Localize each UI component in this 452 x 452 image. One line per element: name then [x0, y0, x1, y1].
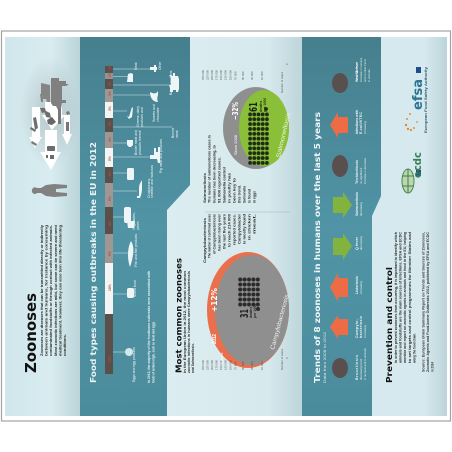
percent labels: 27%	[108, 355, 112, 362]
axis labels: Salmonellosis: 200 000	[210, 69, 214, 80]
trend labels: decreasing	[359, 202, 363, 216]
axis labels: Campylobacteriosis: 125 000	[224, 359, 228, 370]
Campylobacteriosis text: the last five years	[222, 214, 226, 249]
Campylobacteriosis text: to reach 214 000	[228, 214, 232, 247]
trend labels: Brucellosis	[355, 355, 359, 380]
axis labels: Campylobacteriosis: 10 000	[260, 361, 264, 370]
panel: intro	[5, 37, 81, 416]
axis labels: Salmonellosis: 175 000	[214, 69, 218, 80]
label: Campylobacteriosis: Campylobacteriosis	[270, 294, 291, 351]
axis labels: Campylobacteriosis: 225 000	[206, 359, 210, 370]
label: Salmonellosis: Salmonellosis	[276, 112, 292, 158]
trend marker: West Nile fever	[332, 73, 348, 93]
food labels: products thereof	[138, 130, 142, 155]
Campylobacteriosis text: reported cases.	[232, 214, 236, 245]
panel: prevention light	[372, 37, 447, 416]
Salmonellosis text: Salmonella control	[222, 167, 226, 203]
percent labels: 18%	[108, 284, 112, 291]
Salmonellosis text: is found	[248, 189, 252, 203]
food labels: meat	[175, 130, 179, 138]
Salmonellosis circle labels: 61	[247, 102, 260, 112]
prevention text: along the food chain.	[411, 333, 416, 363]
Campylobacteriosis text: The number of confirmed cases	[208, 214, 212, 258]
efsa ring dots	[405, 113, 418, 131]
percent labels: 8%	[108, 221, 112, 226]
Salmonellosis text: The number of salmonellosis cases in	[208, 135, 212, 203]
heading: most common zoonoses: Most common zoonoses	[174, 258, 184, 373]
axis labels: Campylobacteriosis: Number of cases	[280, 348, 284, 370]
axis labels: Campylobacteriosis: 175 000	[214, 359, 218, 370]
trend marker: Campylobacteriosis	[330, 315, 348, 339]
percent labels: 2%	[108, 81, 112, 86]
logo: EFSA	[405, 67, 421, 131]
trend labels: Campylo-	[355, 318, 359, 338]
percent labels: 5%	[108, 171, 112, 176]
sources text	[422, 232, 434, 372]
prevention text	[393, 231, 416, 363]
most common text	[182, 270, 195, 373]
trend marker: VTEC	[330, 112, 348, 138]
axis labels: Campylobacteriosis: 25 000	[250, 361, 254, 370]
percent labels: 9%	[108, 251, 112, 256]
trend labels: Salmonellosis	[355, 192, 359, 216]
axis labels: Campylobacteriosis: 50 000	[241, 361, 245, 370]
food note	[146, 271, 156, 383]
Salmonellosis text: Salmonellosis	[203, 173, 207, 203]
heading: prevention: Prevention and control	[385, 267, 394, 383]
percent labels: 1%	[108, 65, 112, 70]
divider	[205, 211, 290, 213]
food labels	[132, 61, 179, 382]
heading: trends: Trends of 8 zoonoses in humans over the last 5 years	[313, 112, 322, 383]
prevention text: monitor and report on zoonotic agents in animals and food in the EU, helping	[402, 232, 407, 363]
food labels: products and	[140, 107, 144, 127]
axis labels: Salmonellosis: Number of cases	[280, 71, 284, 93]
intro text: medical treatment. However, they can also turn into life-threatening	[57, 224, 62, 356]
axis labels: Campylobacteriosis	[201, 348, 289, 370]
axis labels: Salmonellosis: 100 000	[228, 69, 232, 80]
trend labels: bacteriosis	[359, 316, 363, 338]
Salmonellosis text: in poultry has	[228, 173, 232, 203]
axis labels: Salmonellosis: 75 000	[234, 71, 238, 80]
intro text	[39, 224, 67, 356]
axis labels: Salmonellosis: 10 000	[260, 71, 264, 80]
food labels: Eggs and egg products	[132, 347, 136, 382]
efsa tagline: European Food Safety Authority	[424, 67, 428, 133]
axis labels: Salmonellosis: 0	[285, 63, 289, 65]
Salmonellosis text: Salmonella	[242, 185, 246, 203]
sources text: Zoonotic Agents and Food-borne Outbreaks 2012, published by EFSA and ECDC	[426, 232, 430, 372]
intro text: Most zoonotic infections are mild, but some can be severe and need	[53, 224, 58, 356]
trend labels: increase in humans	[359, 57, 363, 82]
trend labels: Listeriosis	[355, 276, 359, 294]
food icons	[124, 65, 179, 356]
Campylobacteriosis text	[203, 213, 256, 263]
intro text: contaminated foodstuffs or through contact with infected animals.	[48, 225, 53, 356]
heading: food types: Food types causing outbreaks in the EU in 2012	[89, 142, 98, 383]
Salmonellosis circle labels: Since 2008	[233, 134, 238, 155]
sources text: in 2014	[430, 362, 434, 372]
Salmonellosis circle labels: −32%	[231, 102, 240, 120]
axis labels: Campylobacteriosis: 0	[285, 357, 289, 359]
axis labels: Salmonellosis: 50 000	[241, 71, 245, 80]
Salmonellosis text	[203, 135, 256, 203]
axis labels: Campylobacteriosis: 75 000	[234, 361, 238, 370]
most common text: and Salmonellosis.	[190, 343, 195, 373]
most common text: In the European Union in 2012, the most common	[182, 270, 187, 373]
sources text: Source: European Union Summary Report on Trends and Sources of Zoonoses,	[422, 232, 426, 372]
percent labels	[108, 65, 112, 362]
logo: ECDC globe	[402, 169, 421, 193]
Campylobacteriosis circle labels: 31	[238, 309, 251, 318]
intro text: conditions.	[62, 334, 67, 356]
trend labels: Trichinellosis	[355, 160, 359, 184]
Campylobacteriosis text: is mostly found	[242, 214, 246, 244]
food labels: Pig meat and products	[159, 139, 163, 173]
food labels: Sweets and	[152, 104, 156, 122]
percent labels: 2%	[108, 72, 112, 77]
prevention text: In order to prevent zoonoses from occurring, it is important to identify which	[393, 232, 398, 363]
leader lines	[113, 69, 172, 352]
Salmonellosis text: 91 000 reported cases.	[218, 157, 222, 203]
Campylobacteriosis circle labels: 2012	[212, 334, 218, 344]
food labels: Bovine	[171, 128, 175, 138]
Campylobacteriosis circle labels	[210, 288, 257, 364]
dots: 61 Salmonellosis	[248, 107, 269, 165]
food labels: Other	[158, 61, 162, 70]
axis labels: Salmonellosis: 25 000	[250, 71, 254, 80]
food labels: Bakery products	[169, 70, 173, 95]
panel: food types	[80, 37, 190, 416]
percent labels: 6%	[108, 196, 112, 201]
trend labels: increasing	[363, 325, 367, 338]
food labels: Meat	[134, 62, 138, 70]
percent labels: 4%	[108, 121, 112, 126]
trend marker: Listeriosis	[330, 273, 348, 302]
axis labels: Salmonellosis: 150 000	[219, 69, 223, 80]
Campylobacteriosis text: Campylobacteriosis	[203, 218, 207, 263]
food labels: Mixed food	[133, 280, 137, 297]
axis labels: Campylobacteriosis: 250 000	[201, 359, 205, 370]
trend labels: Q fever	[355, 236, 359, 250]
percent labels: 4%	[108, 137, 112, 142]
trend marker: Q fever	[333, 233, 352, 260]
icon: animals to human arrows	[20, 57, 80, 170]
Campylobacteriosis text: meat.	[252, 214, 256, 234]
most common text: zoonotic infections in humans were Campylobacteriosis	[186, 270, 191, 373]
Campylobacteriosis circle labels: deaths	[249, 307, 253, 318]
rotated text layer	[22, 57, 434, 383]
panel: middle light	[167, 37, 302, 416]
trend marker: Trichinellosis	[332, 155, 348, 177]
trend labels: West Nile fever	[355, 61, 359, 82]
food note: In 2012, the majority of the foodborne outbreaks were associated with	[146, 271, 151, 383]
trend marker: Salmonellosis	[333, 192, 352, 218]
axis labels: Campylobacteriosis: 100 000	[228, 359, 232, 370]
axis labels: Salmonellosis: 225 000	[206, 69, 210, 80]
trends subtitle: Data from 2008 to 2012	[323, 332, 327, 383]
trend labels: in humans and in animals	[363, 348, 367, 380]
Campylobacteriosis text: of Campylobacteriosis	[212, 214, 216, 254]
trend labels: increase or decrease	[363, 157, 367, 184]
trend marker: Brucellosis	[332, 358, 348, 378]
food labels: chocolate	[156, 107, 160, 122]
axis labels: Campylobacteriosis: 200 000	[210, 359, 214, 370]
Salmonellosis text: humans has been decreasing, to	[212, 144, 216, 203]
Campylobacteriosis text: has been rising over	[218, 213, 222, 251]
axis labels: Salmonellosis: 125 000	[224, 69, 228, 80]
axis labels: Salmonellosis	[201, 63, 289, 93]
food labels: Fish and fish products	[134, 234, 138, 267]
trend labels: no significant	[359, 167, 363, 184]
food note: foods of animal origin, such as meat and eggs.	[150, 321, 156, 383]
food labels: Cheese, dairy	[136, 106, 140, 127]
panel: trends band	[302, 37, 381, 416]
Campylobacteriosis text: in chicken	[248, 214, 252, 240]
food labels: Crustaceans,	[147, 178, 151, 198]
trend labels: increasing	[359, 281, 363, 294]
trend labels: in animals	[367, 69, 371, 82]
Campylobacteriosis circle labels: per 1000	[253, 304, 257, 318]
icon: human figure	[32, 184, 67, 197]
axis labels: Salmonellosis: 250 000	[201, 69, 205, 80]
Campylobacteriosis text: Campylobacter	[238, 213, 242, 244]
trend labels: E.coli/VTEC	[359, 112, 363, 134]
Campylobacteriosis circle labels: +12%	[210, 288, 219, 312]
Salmonellosis text: in eggs	[252, 191, 256, 203]
prevention text: animals and foodstuffs are the main sources of infections. EFSA and ECDC	[398, 232, 403, 363]
Salmonellosis circle labels: per 1000	[263, 98, 267, 112]
chart: Salmonellosis circle	[223, 87, 292, 169]
trend labels: Infections with	[355, 110, 359, 134]
bar: food shares stacked column	[105, 66, 113, 374]
trend labels: and no clear trend	[363, 59, 367, 82]
Salmonellosis text: this trend.	[238, 185, 242, 203]
trend labels: decreasing trend	[359, 359, 363, 380]
percent labels: 5%	[108, 156, 112, 161]
intro text: between animals and humans, for instance by consuming	[44, 224, 49, 356]
prevention text: to set targets and control programmes for Member States and	[407, 231, 412, 363]
title: Zoonoses	[22, 293, 40, 373]
food labels: juices	[136, 221, 140, 231]
Salmonellosis text: been key to	[232, 177, 236, 203]
trend labels: increasing	[363, 121, 367, 134]
ecdc wordmark: ecdc	[411, 152, 424, 178]
food labels: Broiler meat and	[134, 130, 138, 155]
Salmonellosis circle labels	[231, 98, 267, 155]
intro text: Zoonoses are diseases that can be transmitted directly or indirectly	[39, 224, 44, 356]
food labels: Vegetables,	[132, 212, 136, 230]
dots: 31 Campylobacteriosis	[238, 277, 260, 311]
trend labels	[355, 57, 371, 380]
Campylobacteriosis circle labels: Cases	[219, 353, 224, 364]
percent labels: 3%	[108, 91, 112, 96]
Salmonellosis circle labels: deaths	[259, 101, 263, 112]
food labels: shellfish and molluscs	[150, 165, 154, 198]
chart: Campylobacteriosis circle	[207, 252, 291, 368]
axis labels: Campylobacteriosis: 150 000	[219, 359, 223, 370]
percent labels: 3%	[108, 106, 112, 111]
efsa wordmark: efsa	[411, 79, 426, 110]
trend labels: decreasing	[359, 236, 363, 250]
